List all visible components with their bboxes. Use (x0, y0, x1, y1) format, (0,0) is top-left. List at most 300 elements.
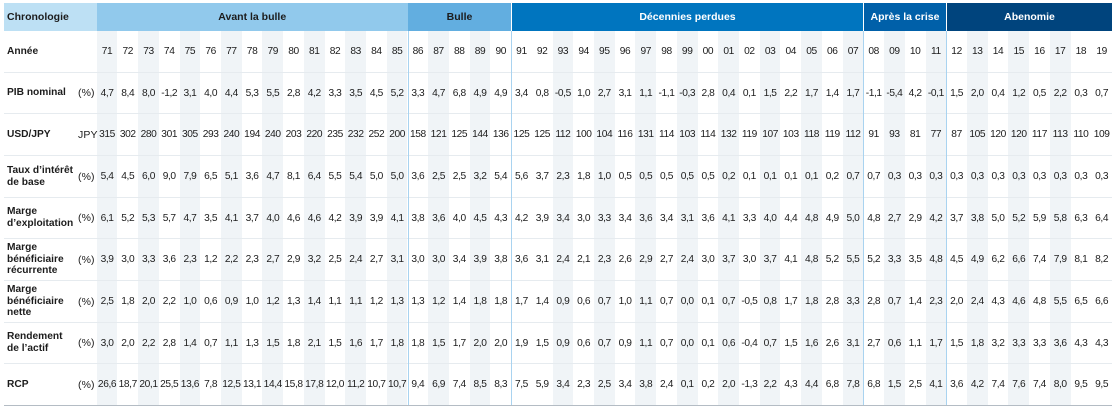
row: Marge bénéficiaire nette: 0,7 (598, 296, 611, 307)
row: Marge d'exploitation: 3,4 (660, 212, 673, 224)
row: RCP: 14,4 (264, 379, 282, 390)
header: Décennies perdues (512, 3, 863, 31)
row: Marge bénéficiaire nette: 0,9 (225, 296, 238, 307)
row: Marge bénéficiaire récurrente: 3,3 (888, 254, 901, 265)
row: Marge bénéficiaire récurrente: 3,1 (391, 254, 404, 265)
row: Marge bénéficiaire récurrente: (%) (78, 254, 95, 266)
row: Année: 81 (309, 46, 320, 57)
row: Marge d'exploitation: 4,1 (225, 212, 238, 224)
row: Année: 89 (475, 46, 485, 57)
row: PIB nominal: 3,1 (619, 88, 632, 98)
row: Rendement de l'actif: 1,7 (453, 338, 466, 348)
row: PIB nominal: 3,1 (183, 88, 196, 98)
row: RCP: 7,4 (453, 379, 466, 390)
row: RCP: 2,5 (598, 379, 611, 390)
row: Marge bénéficiaire nette: -0,5 (741, 296, 757, 307)
row: USD/JPY: 120 (990, 129, 1006, 140)
header: Après la crise: Après la crise (871, 11, 939, 23)
row: RCP: 17,8 (305, 379, 323, 390)
header: Après la crise (864, 3, 946, 31)
row: Rendement de l'actif: 2,0 (494, 338, 507, 348)
row: RCP: 8,5 (474, 379, 486, 390)
row: PIB nominal: 5,2 (391, 88, 404, 98)
row: RCP: 1,5 (888, 379, 901, 390)
row: RCP: -1,3 (741, 379, 757, 390)
row: Marge bénéficiaire nette: 2,3 (929, 296, 942, 307)
row: Marge d'exploitation: 4,2 (929, 212, 942, 224)
row: Marge d'exploitation: 2,9 (909, 212, 922, 224)
row: Marge bénéficiaire récurrente: 2,9 (287, 254, 300, 265)
row: Marge d'exploitation: 3,9 (349, 212, 362, 224)
row: RCP: 7,8 (204, 379, 217, 390)
row: Taux d'intérêt de base: 0,2 (826, 171, 839, 182)
row: Marge d'exploitation: 4,9 (826, 212, 839, 224)
row: Marge d'exploitation: 4,0 (453, 212, 466, 224)
row: Marge d'exploitation: 4,2 (328, 212, 341, 224)
row: USD/JPY: 301 (161, 129, 177, 140)
row: Marge bénéficiaire nette: 1,3 (391, 296, 404, 307)
row: Marge bénéficiaire récurrente: 2,7 (370, 254, 383, 265)
row: Taux d'intérêt de base: 2,5 (453, 171, 466, 182)
row: Marge d'exploitation: 6,4 (1095, 212, 1108, 224)
row: Année: 87 (433, 46, 444, 57)
row: Taux d'intérêt de base: 0,3 (1054, 171, 1067, 182)
row: RCP: 10,7 (367, 379, 386, 390)
row: Marge bénéficiaire récurrente: 4,5 (950, 254, 963, 265)
row: Marge bénéficiaire nette: 1,3 (287, 296, 300, 307)
row: Marge bénéficiaire nette: 2,0 (142, 296, 155, 307)
row: Marge bénéficiaire récurrente: 2,2 (225, 254, 238, 265)
row: Année: 09 (889, 46, 900, 57)
row: Marge bénéficiaire nette: 0,8 (764, 296, 777, 307)
row: Taux d'intérêt de base: 5,0 (370, 171, 383, 182)
row: RCP: 11,2 (347, 379, 364, 390)
row: USD/JPY: 131 (638, 129, 654, 140)
header: Bulle (408, 3, 511, 31)
row: Année: 17 (1055, 46, 1065, 57)
row: Taux d'intérêt de base: 7,9 (183, 171, 196, 182)
header: Chronologie: Chronologie (7, 11, 69, 23)
row: USD/JPY: 240 (265, 129, 281, 140)
row: Marge bénéficiaire nette: 2,8 (826, 296, 839, 307)
row: USD/JPY: 125 (451, 129, 467, 140)
row: Marge d'exploitation: 3,8 (971, 212, 984, 224)
row: Marge d'exploitation: 5,2 (121, 212, 134, 224)
row: Marge bénéficiaire nette: nette (7, 307, 31, 318)
row: PIB nominal: 0,4 (992, 88, 1004, 98)
row: Rendement de l'actif: 4,3 (1074, 338, 1087, 348)
row: RCP: 15,8 (284, 379, 303, 390)
row: Rendement de l'actif: 1,1 (909, 338, 922, 348)
row: Année: 00 (703, 46, 713, 57)
row: USD/JPY: 104 (596, 129, 612, 140)
row: PIB nominal: 1,0 (577, 88, 590, 98)
row: Marge d'exploitation: 2,7 (888, 212, 901, 224)
row: PIB nominal: 4,2 (308, 88, 321, 98)
row: PIB nominal: 1,7 (805, 88, 818, 98)
row: Rendement de l'actif: 2,1 (308, 338, 321, 348)
row: RCP: 6,8 (826, 379, 839, 390)
row: Marge d'exploitation: 3,6 (432, 212, 445, 224)
row: Taux d'intérêt de base: 3,7 (536, 171, 549, 182)
row: RCP: 13,1 (243, 379, 261, 390)
row: Marge d'exploitation: 4,1 (722, 212, 735, 224)
row: Marge d'exploitation: 3,4 (556, 212, 569, 224)
row: Marge bénéficiaire récurrente: 2,3 (598, 254, 611, 265)
row: Rendement de l'actif: 0,6 (722, 338, 735, 348)
row: Taux d'intérêt de base (4, 156, 1112, 198)
row: Marge bénéficiaire nette: 4,6 (1012, 296, 1025, 307)
row: PIB nominal: 0,1 (743, 88, 756, 98)
row: PIB nominal: 4,0 (204, 88, 217, 98)
row: Marge bénéficiaire nette: 1,8 (494, 296, 507, 307)
row: PIB nominal: 1,1 (639, 88, 652, 98)
row: USD/JPY: 114 (659, 129, 674, 140)
row: PIB nominal: 3,3 (411, 88, 424, 98)
row: Rendement de l'actif: 2,6 (826, 338, 839, 348)
row: Marge bénéficiaire nette: 2,5 (101, 296, 114, 307)
row: Marge bénéficiaire nette: 4,3 (992, 296, 1004, 307)
row: Taux d'intérêt de base: 0,5 (619, 171, 632, 182)
row: Marge bénéficiaire nette: 1,2 (266, 296, 279, 307)
row: Marge bénéficiaire récurrente: 7,9 (1054, 254, 1067, 265)
row: RCP: 18,7 (119, 379, 137, 390)
row: Marge bénéficiaire nette: 0,6 (204, 296, 217, 307)
row: USD/JPY: 103 (783, 129, 799, 140)
row: Marge bénéficiaire récurrente (4, 239, 1112, 281)
row: Marge bénéficiaire nette: 1,2 (370, 296, 383, 307)
row: Marge bénéficiaire récurrente: 5,2 (867, 254, 880, 265)
row: Taux d'intérêt de base: 0,7 (867, 171, 880, 182)
row: Taux d'intérêt de base: 0,5 (701, 171, 714, 182)
row: Marge bénéficiaire récurrente: 3,7 (764, 254, 777, 265)
row: Rendement de l'actif: 2,0 (474, 338, 486, 348)
row: USD/JPY: 158 (410, 129, 426, 140)
row: PIB nominal: 2,7 (598, 88, 611, 98)
row: PIB nominal: 4,7 (432, 88, 445, 98)
row: USD/JPY: 125 (514, 129, 529, 140)
row: RCP: 3,4 (556, 379, 569, 390)
row: Marge bénéficiaire nette (4, 281, 1112, 323)
row: Marge d'exploitation: 3,1 (681, 212, 694, 224)
header: Avant la bulle: Avant la bulle (218, 11, 286, 23)
row: Marge bénéficiaire nette: 1,4 (308, 296, 321, 307)
row: Marge bénéficiaire nette: 2,8 (867, 296, 880, 307)
row: Année: 06 (827, 46, 838, 57)
row: RCP: 20,1 (139, 379, 158, 390)
row: RCP: 0,2 (701, 379, 714, 390)
row: Marge bénéficiaire récurrente: 3,6 (515, 254, 528, 265)
row: USD/JPY: JPY (78, 128, 98, 140)
row: RCP: 6,8 (867, 379, 880, 390)
row: Marge bénéficiaire nette: 4,8 (1033, 296, 1046, 307)
row: Marge d'exploitation: 3,7 (246, 212, 259, 224)
row: Taux d'intérêt de base: 0,1 (805, 171, 818, 182)
row: RCP: 4,2 (971, 379, 984, 390)
row: Marge bénéficiaire récurrente: 3,5 (909, 254, 922, 265)
row: Marge bénéficiaire récurrente: récurrente (7, 265, 57, 276)
row: PIB nominal: 6,8 (453, 88, 466, 98)
row: Rendement de l'actif: 3,1 (846, 338, 859, 348)
row: Rendement de l'actif: 0,7 (598, 338, 611, 348)
row: Marge bénéficiaire nette: 2,2 (163, 296, 176, 307)
row: Marge d'exploitation: 3,7 (950, 212, 963, 224)
row: Marge d'exploitation: (%) (78, 212, 95, 224)
row: Marge d'exploitation: 6,1 (101, 212, 114, 224)
row: Marge bénéficiaire nette: 1,0 (619, 296, 632, 307)
row: Taux d'intérêt de base: 0,3 (950, 171, 963, 182)
row: Année: 99 (682, 46, 692, 57)
row: USD/JPY: 105 (969, 129, 985, 140)
row: RCP: 9,5 (1074, 379, 1087, 390)
row: Marge d'exploitation: 3,8 (411, 212, 424, 224)
row: PIB nominal: 2,2 (784, 88, 797, 98)
row: Taux d'intérêt de base: 1,8 (577, 171, 590, 182)
row: PIB nominal: 4,2 (909, 88, 922, 98)
row: Rendement de l'actif: 1,6 (349, 338, 362, 348)
row: Année: 90 (495, 46, 506, 57)
row: Taux d'intérêt de base: 0,5 (681, 171, 694, 182)
row: Marge bénéficiaire récurrente: 3,9 (474, 254, 486, 265)
row: Année: 86 (413, 46, 423, 57)
row: RCP: 2,4 (660, 379, 673, 390)
row: USD/JPY: 103 (679, 129, 695, 140)
row: Rendement de l'actif: 4,3 (1095, 338, 1108, 348)
row: USD/JPY: 112 (555, 129, 570, 140)
row: Taux d'intérêt de base: 0,1 (743, 171, 756, 182)
row: Marge d'exploitation: d’exploitation (7, 218, 73, 229)
row: Rendement de l'actif: 3,6 (1054, 338, 1067, 348)
row: Rendement de l'actif: 3,0 (101, 338, 114, 348)
row: Année: 94 (578, 46, 589, 57)
row: Marge d'exploitation: Marge (7, 206, 37, 217)
row: Marge bénéficiaire nette: 0,0 (681, 296, 694, 307)
row: Rendement de l'actif: 1,3 (246, 338, 259, 348)
header: Chronologie (4, 3, 96, 31)
row: Rendement de l'actif: 1,5 (328, 338, 341, 348)
row: Marge bénéficiaire récurrente: 6,2 (992, 254, 1004, 265)
row: PIB nominal: 1,5 (950, 88, 963, 98)
row: Marge bénéficiaire nette: 2,0 (950, 296, 963, 307)
row: PIB nominal: 2,8 (701, 88, 714, 98)
row: Marge d'exploitation: 4,8 (805, 212, 818, 224)
row: USD/JPY: 232 (348, 129, 364, 140)
row: Marge bénéficiaire nette: 1,4 (536, 296, 549, 307)
row: Année: 19 (1096, 46, 1107, 57)
row: Marge d'exploitation: 4,1 (391, 212, 404, 224)
row: Rendement de l'actif: Rendement (7, 331, 62, 342)
row: PIB nominal: 3,4 (515, 88, 528, 98)
row: PIB nominal: (%) (78, 87, 95, 99)
row: Année: 92 (537, 46, 547, 57)
row: Marge bénéficiaire récurrente: 3,0 (743, 254, 756, 265)
row: Marge bénéficiaire récurrente: 4,8 (929, 254, 942, 265)
row: Marge d'exploitation: 4,6 (308, 212, 321, 224)
row: Marge d'exploitation: 3,4 (619, 212, 632, 224)
row: Marge d'exploitation: 5,0 (846, 212, 859, 224)
row: Marge bénéficiaire récurrente: 3,6 (163, 254, 176, 265)
row: Marge bénéficiaire récurrente: 2,4 (681, 254, 694, 265)
row: PIB nominal: -0,3 (679, 88, 695, 98)
header: Abenomie: Abenomie (1004, 11, 1055, 23)
row: USD/JPY: 116 (618, 129, 633, 140)
row: RCP: 12,0 (326, 379, 344, 390)
row: Taux d'intérêt de base: 0,1 (764, 171, 777, 182)
row: Marge d'exploitation: 3,3 (743, 212, 756, 224)
row: Marge d'exploitation: 4,6 (287, 212, 300, 224)
row: Rendement de l'actif: 0,0 (681, 338, 694, 348)
row: Rendement de l'actif: 2,0 (121, 338, 134, 348)
row: Marge bénéficiaire nette: 1,0 (246, 296, 259, 307)
row: Année: 96 (620, 46, 630, 57)
row: USD/JPY: 113 (1053, 129, 1068, 140)
row: Année: 18 (1076, 46, 1086, 57)
row: Taux d'intérêt de base: 2,3 (556, 171, 569, 182)
row: Taux d'intérêt de base: 2,5 (432, 171, 445, 182)
row: Rendement de l'actif: 1,7 (929, 338, 942, 348)
row: Taux d'intérêt de base: 0,2 (722, 171, 735, 182)
row: USD/JPY: 117 (1032, 129, 1047, 140)
row: Marge bénéficiaire récurrente: 3,8 (494, 254, 507, 265)
row: Marge bénéficiaire nette: 1,0 (183, 296, 196, 307)
row: Marge bénéficiaire nette: 1,2 (432, 296, 445, 307)
row: Marge bénéficiaire récurrente: 4,9 (971, 254, 984, 265)
row: Taux d'intérêt de base: 5,4 (101, 171, 114, 182)
row: PIB nominal: 2,0 (971, 88, 984, 98)
row: PIB nominal: -1,2 (161, 88, 177, 98)
row: PIB nominal: 4,4 (225, 88, 238, 98)
row: Marge d'exploitation: 4,0 (764, 212, 777, 224)
row: Taux d'intérêt de base: 0,3 (992, 171, 1004, 182)
row: PIB nominal: -1,1 (658, 88, 674, 98)
row: Marge bénéficiaire nette: 3,3 (846, 296, 859, 307)
row: Marge bénéficiaire récurrente: 6,6 (1012, 254, 1025, 265)
row: Marge bénéficiaire récurrente: 3,7 (722, 254, 735, 265)
row: RCP: 3,6 (950, 379, 963, 390)
row: Marge bénéficiaire nette: 0,7 (722, 296, 735, 307)
row: Année: 78 (247, 46, 257, 57)
row: Année: 10 (910, 46, 920, 57)
row: RCP: 6,9 (432, 379, 445, 390)
row: USD/JPY: 293 (203, 129, 219, 140)
row: Taux d'intérêt de base: 0,7 (846, 171, 859, 182)
row: Marge d'exploitation: 5,9 (1033, 212, 1046, 224)
row: Année: 97 (640, 46, 651, 57)
row: Marge bénéficiaire récurrente: 7,4 (1033, 254, 1046, 265)
row: PIB nominal: -5,4 (886, 88, 902, 98)
row: Marge d'exploitation: 4,0 (266, 212, 279, 224)
row: Marge d'exploitation: 3,0 (577, 212, 590, 224)
row: RCP: 3,8 (639, 379, 652, 390)
row: Année: Année (7, 46, 38, 57)
row: Année: 15 (1013, 46, 1024, 57)
row: Marge bénéficiaire récurrente: 4,8 (805, 254, 818, 265)
row: Taux d'intérêt de base: 0,5 (639, 171, 652, 182)
row: RCP: 3,4 (619, 379, 632, 390)
row: Marge d'exploitation: 4,8 (867, 212, 880, 224)
row: Marge bénéficiaire récurrente: 8,1 (1074, 254, 1087, 265)
row: Taux d'intérêt de base: Taux d’intérêt (7, 165, 73, 176)
row: Année: 77 (226, 46, 237, 57)
row: Marge bénéficiaire nette: 1,1 (639, 296, 652, 307)
row: PIB nominal: 4,9 (494, 88, 507, 98)
row: PIB nominal: 1,2 (1012, 88, 1025, 98)
row: Année: 13 (972, 46, 983, 57)
row: USD/JPY: 119 (825, 129, 840, 140)
row: RCP: 10,7 (388, 379, 406, 390)
row: USD/JPY: 203 (286, 129, 301, 140)
row: USD/JPY: 91 (868, 129, 879, 140)
row: Rendement de l'actif: 0,6 (577, 338, 590, 348)
row: Marge d'exploitation: 5,8 (1054, 212, 1067, 224)
row: Année: 02 (744, 46, 755, 57)
row: PIB nominal: 8,4 (121, 88, 134, 98)
row: Taux d'intérêt de base: 0,3 (929, 171, 942, 182)
row: RCP: 8,3 (494, 379, 507, 390)
row: RCP: RCP (7, 379, 29, 390)
row: Rendement de l'actif: 0,7 (764, 338, 777, 348)
row: Marge d'exploitation: 3,6 (639, 212, 652, 224)
row: Marge bénéficiaire récurrente: 3,4 (453, 254, 466, 265)
row: RCP: 0,1 (681, 379, 694, 390)
row: RCP: 25,5 (160, 379, 178, 390)
row: Taux d'intérêt de base: 0,3 (909, 171, 922, 182)
row: PIB nominal: 8,0 (142, 88, 155, 98)
row: Marge bénéficiaire récurrente: 2,6 (619, 254, 632, 265)
row: Rendement de l'actif: 1,9 (515, 338, 528, 348)
row: USD/JPY: 136 (493, 129, 509, 140)
row: PIB nominal: 1,4 (826, 88, 839, 98)
row: Taux d'intérêt de base: 6,0 (142, 171, 155, 182)
row: PIB nominal: 0,5 (1033, 88, 1046, 98)
row: USD/JPY: 114 (700, 129, 715, 140)
header: Décennies perdues: Décennies perdues (639, 11, 736, 23)
row: Marge d'exploitation: 3,9 (536, 212, 549, 224)
row: Année: 03 (765, 46, 775, 57)
row: Rendement de l'actif: 1,6 (805, 338, 818, 348)
row: RCP (4, 364, 1112, 406)
row: Marge d'exploitation: 4,7 (183, 212, 196, 224)
row: Marge bénéficiaire récurrente: bénéficiaire (7, 254, 64, 265)
row: USD/JPY: 235 (327, 129, 343, 140)
row: PIB nominal: 0,4 (722, 88, 735, 98)
row: USD/JPY: 93 (889, 129, 900, 140)
row: Marge bénéficiaire récurrente: 3,3 (142, 254, 155, 265)
row: USD/JPY: 87 (951, 129, 962, 140)
row: Marge bénéficiaire nette: 1,4 (909, 296, 922, 307)
row: RCP: 7,4 (992, 379, 1004, 390)
header: Abenomie (947, 3, 1112, 31)
row: Rendement de l'actif: 0,7 (204, 338, 217, 348)
row: Marge d'exploitation: 5,3 (142, 212, 155, 224)
row: Année: 85 (392, 46, 402, 57)
row: PIB nominal: 1,7 (846, 88, 859, 98)
row: Taux d'intérêt de base: 0,5 (660, 171, 673, 182)
row: RCP: (%) (78, 378, 95, 390)
row: Rendement de l'actif: 0,9 (556, 338, 569, 348)
row: Marge d'exploitation: 6,3 (1074, 212, 1087, 224)
row: Marge bénéficiaire récurrente: 3,9 (101, 254, 114, 265)
row: Rendement de l'actif: 1,5 (536, 338, 549, 348)
row: Rendement de l'actif: 0,9 (619, 338, 632, 348)
row: Année: 72 (122, 46, 133, 57)
row: Taux d'intérêt de base: 3,6 (411, 171, 424, 182)
row: Marge bénéficiaire récurrente: 3,0 (701, 254, 714, 265)
row: Taux d'intérêt de base: 5,0 (391, 171, 404, 182)
row: Marge bénéficiaire récurrente: Marge (7, 242, 37, 253)
row: RCP: 7,8 (846, 379, 859, 390)
header: Bulle: Bulle (447, 11, 472, 23)
